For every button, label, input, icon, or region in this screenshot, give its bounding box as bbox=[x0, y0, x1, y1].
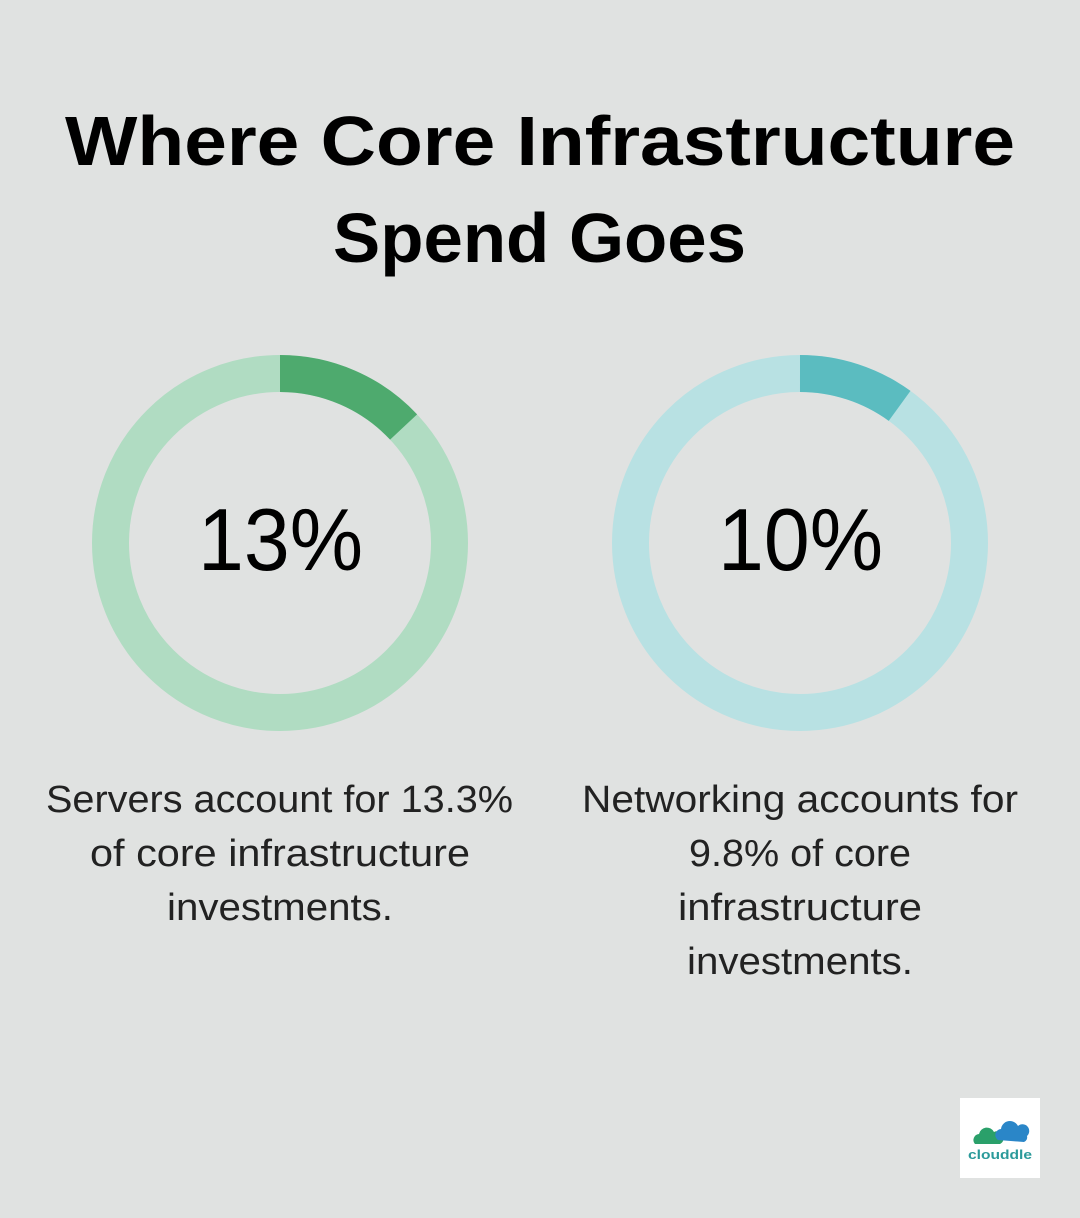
text: networking caption: infrastructure bbox=[678, 887, 922, 929]
text: networking caption bbox=[582, 779, 1018, 983]
title: Where Core Infrastructure bbox=[65, 102, 1015, 180]
text: networking caption: investments. bbox=[687, 941, 913, 983]
text: servers caption: of core infrastructure bbox=[90, 833, 470, 875]
donut: networking 10% bbox=[630, 374, 970, 712]
title bbox=[65, 102, 1015, 277]
text: networking caption: 9.8% of core bbox=[689, 833, 911, 875]
text: servers caption: investments. bbox=[167, 887, 393, 929]
title: Spend Goes bbox=[333, 199, 746, 277]
donut: servers 13%: 13% bbox=[198, 490, 363, 589]
logo: clouddle: clouddle bbox=[968, 1147, 1032, 1162]
donut: networking 10%: 10% bbox=[718, 490, 883, 589]
logo: clouddle bbox=[960, 1098, 1040, 1178]
text: servers caption bbox=[46, 779, 513, 929]
text: networking caption: Networking accounts for bbox=[582, 779, 1018, 821]
text: servers caption: Servers account for 13.3% bbox=[46, 779, 513, 821]
donut: servers 13% bbox=[110, 374, 450, 712]
